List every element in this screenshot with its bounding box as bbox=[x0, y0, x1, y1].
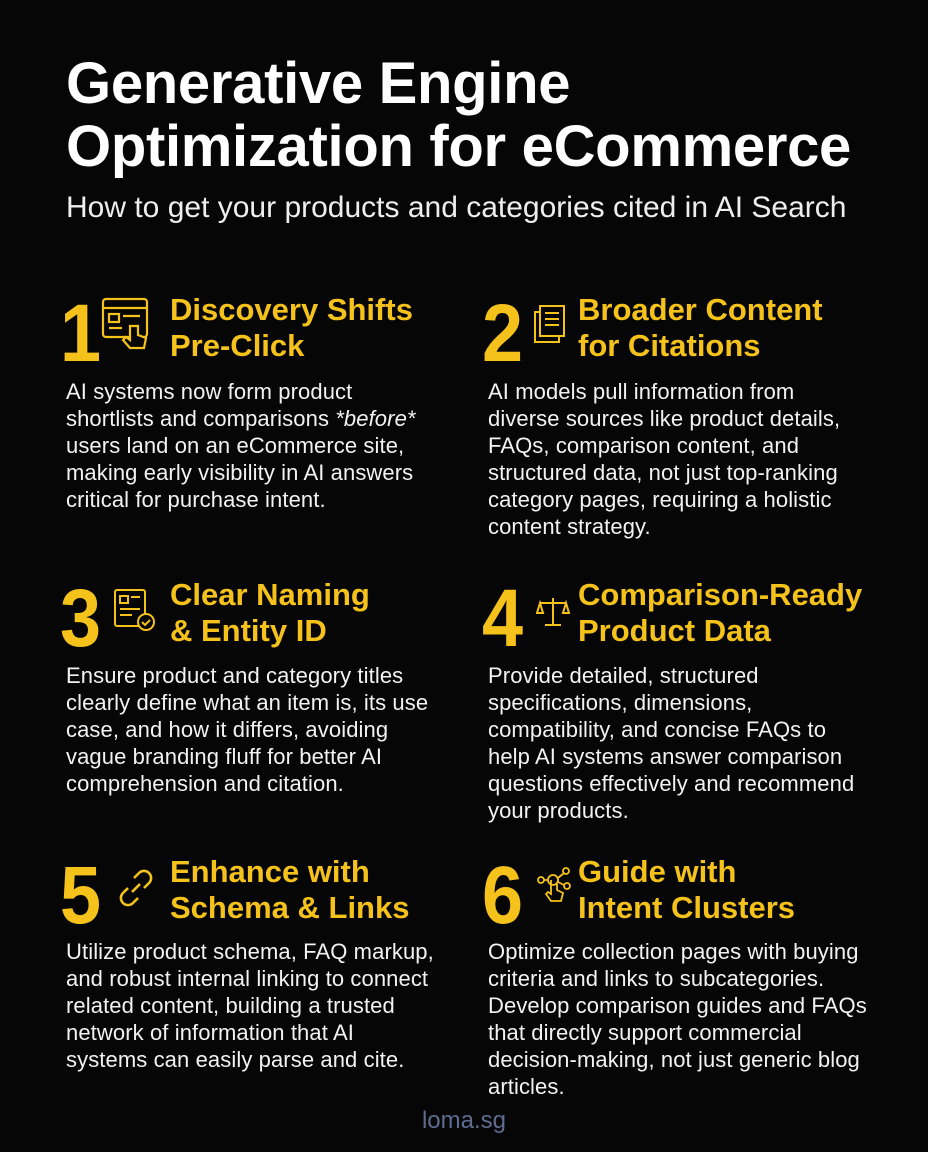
body 5: network of information that AI bbox=[66, 1020, 354, 1045]
body 6: that directly support commercial bbox=[488, 1020, 802, 1045]
title bbox=[66, 51, 851, 179]
body 4: specifications, dimensions, bbox=[488, 690, 752, 715]
body 1: critical for purchase intent. bbox=[66, 487, 326, 512]
panel 4 bbox=[482, 573, 862, 823]
heading 6 bbox=[578, 854, 795, 925]
panel 1 bbox=[60, 288, 416, 512]
footer: loma.sg bbox=[422, 1107, 506, 1134]
icon: hand with nodes bbox=[537, 867, 571, 902]
panel 6 bbox=[482, 850, 867, 1099]
heading 4 bbox=[578, 577, 862, 648]
body 5: systems can easily parse and cite. bbox=[66, 1047, 404, 1072]
body 6: decision-making, not just generic blog bbox=[488, 1047, 860, 1072]
body 2: FAQs, comparison content, and bbox=[488, 433, 799, 458]
body 1 bbox=[66, 379, 416, 512]
heading 3: & Entity ID bbox=[170, 613, 327, 648]
body 2: content strategy. bbox=[488, 514, 651, 539]
heading 2: Broader Content bbox=[578, 292, 823, 327]
body 4: Provide detailed, structured bbox=[488, 663, 759, 688]
heading 3: Clear Naming bbox=[170, 577, 370, 612]
icon: link bbox=[120, 870, 152, 906]
panel 3 bbox=[60, 573, 428, 796]
heading 2 bbox=[578, 292, 823, 363]
heading 3 bbox=[170, 577, 370, 648]
icon: browser click bbox=[102, 298, 148, 350]
subtitle: How to get your products and categories cited in AI Search bbox=[66, 191, 846, 224]
body 6: articles. bbox=[488, 1074, 565, 1099]
body 2 bbox=[488, 379, 840, 539]
body 3: comprehension and citation. bbox=[66, 771, 344, 796]
body 3 bbox=[66, 663, 428, 796]
body 4: questions effectively and recommend bbox=[488, 771, 854, 796]
body 2: diverse sources like product details, bbox=[488, 406, 840, 431]
body 6: criteria and links to subcategories. bbox=[488, 966, 824, 991]
heading 6: Intent Clusters bbox=[578, 890, 795, 925]
heading 2: for Citations bbox=[578, 328, 761, 363]
body 3: Ensure product and category titles bbox=[66, 663, 403, 688]
icon: checked document bbox=[114, 589, 155, 631]
body 4: help AI systems answer comparison bbox=[488, 744, 842, 769]
body 5: Utilize product schema, FAQ markup, bbox=[66, 939, 434, 964]
body 4 bbox=[488, 663, 854, 823]
body 1: AI systems now form product bbox=[66, 379, 352, 404]
number 5: 5 bbox=[60, 850, 101, 941]
body 1: making early visibility in AI answers bbox=[66, 460, 413, 485]
heading 1: Pre-Click bbox=[170, 328, 304, 363]
icon: scales bbox=[536, 598, 570, 626]
body 5: and robust internal linking to connect bbox=[66, 966, 428, 991]
body 4: compatibility, and concise FAQs to bbox=[488, 717, 826, 742]
heading 5: Schema & Links bbox=[170, 890, 409, 925]
icon: document bbox=[534, 305, 565, 343]
heading 4: Product Data bbox=[578, 613, 771, 648]
body 4: your products. bbox=[488, 798, 629, 823]
panel 5 bbox=[60, 850, 434, 1072]
body 6: Develop comparison guides and FAQs bbox=[488, 993, 867, 1018]
body 6 bbox=[488, 939, 867, 1099]
body 3: clearly define what an item is, its use bbox=[66, 690, 428, 715]
heading 5 bbox=[170, 854, 409, 925]
number 4: 4 bbox=[482, 573, 523, 664]
body 3: case, and how it differs, avoiding bbox=[66, 717, 388, 742]
body 1: shortlists and comparisons *before* bbox=[66, 406, 416, 431]
heading 1 bbox=[170, 292, 413, 363]
heading 4: Comparison-Ready bbox=[578, 577, 862, 612]
title: Generative Engine bbox=[66, 51, 570, 116]
body 2: category pages, requiring a holistic bbox=[488, 487, 832, 512]
body 6: Optimize collection pages with buying bbox=[488, 939, 859, 964]
heading 1: Discovery Shifts bbox=[170, 292, 413, 327]
body 2: AI models pull information from bbox=[488, 379, 794, 404]
number 2: 2 bbox=[482, 288, 523, 379]
body 3: vague branding fluff for better AI bbox=[66, 744, 382, 769]
title: Optimization for eCommerce bbox=[66, 114, 851, 179]
heading 5: Enhance with bbox=[170, 854, 370, 889]
body 1: users land on an eCommerce site, bbox=[66, 433, 404, 458]
number 3: 3 bbox=[60, 573, 101, 664]
body 5 bbox=[66, 939, 434, 1072]
panel 2 bbox=[482, 288, 840, 539]
number 6: 6 bbox=[482, 850, 523, 941]
body 2: structured data, not just top-ranking bbox=[488, 460, 838, 485]
number 1: 1 bbox=[60, 288, 101, 379]
heading 6: Guide with bbox=[578, 854, 736, 889]
body 5: related content, building a trusted bbox=[66, 993, 395, 1018]
